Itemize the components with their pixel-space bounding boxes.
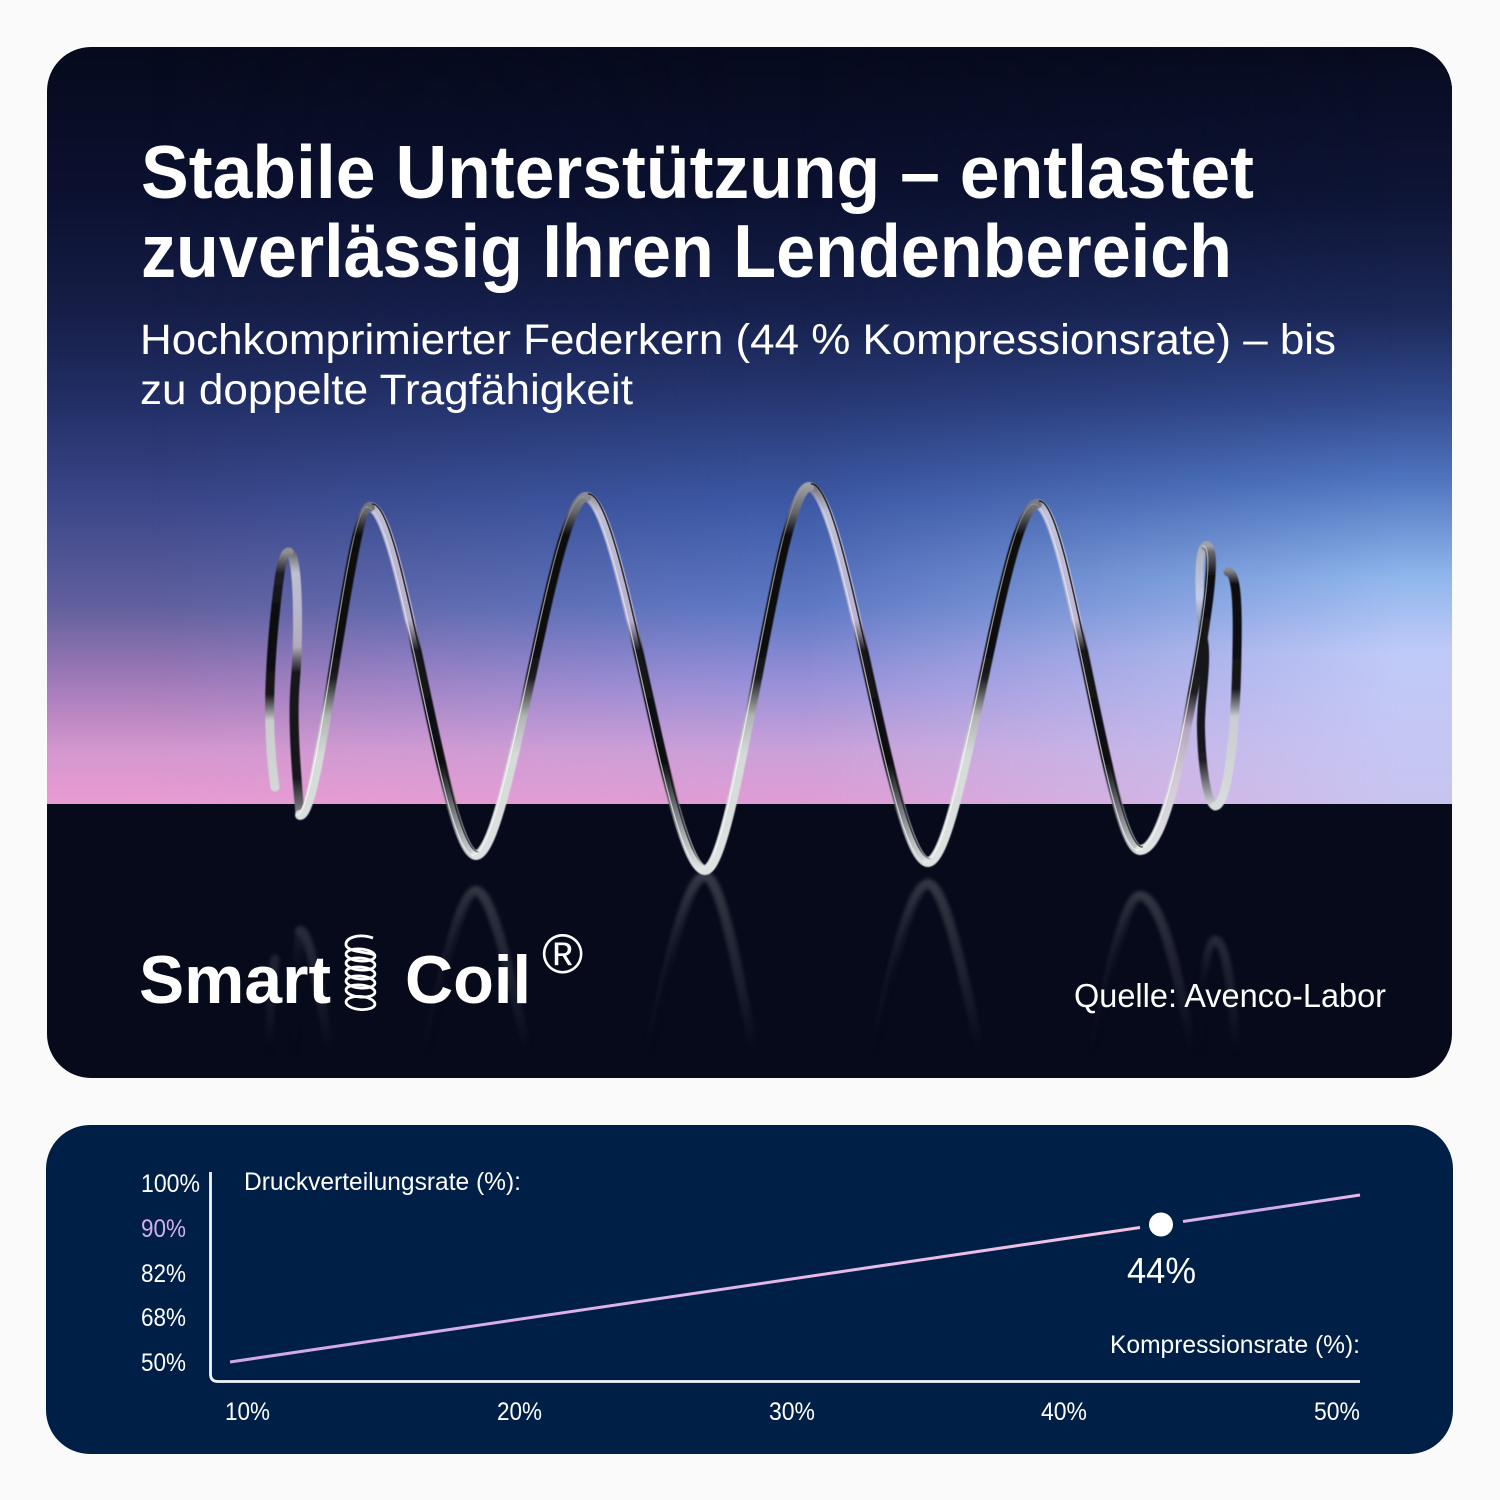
logo: Smart Coil: Smart — [139, 942, 331, 1018]
trend line — [230, 1195, 1360, 1362]
y-axis labels: 50% — [141, 1349, 186, 1377]
x-axis labels: 10% — [225, 1398, 270, 1426]
x-axis labels: 40% — [1041, 1398, 1087, 1426]
y-axis labels: 90% — [141, 1215, 186, 1243]
x-axis labels: 20% — [497, 1398, 542, 1426]
x-axis labels — [225, 1398, 1360, 1426]
source note: Quelle: Avenco-Labor — [1074, 977, 1386, 1014]
subtitle: zu doppelte Tragfähigkeit — [140, 366, 633, 414]
title — [141, 130, 1254, 293]
sky gradient background — [47, 47, 1452, 804]
logo: Smart Coil: Coil — [405, 942, 531, 1018]
x-axis labels: 50% — [1314, 1398, 1360, 1426]
logo: Smart Coil: ® — [542, 922, 583, 985]
x-axis title: Kompressionsrate (%): — [1110, 1331, 1360, 1359]
y-axis labels: 82% — [141, 1260, 186, 1288]
logo: Smart Coil — [139, 922, 583, 1018]
y-axis title: Druckverteilungsrate (%): — [244, 1168, 521, 1196]
illustration: metal coil spring — [270, 484, 1237, 870]
y-axis labels: 100% — [141, 1170, 200, 1198]
y-axis labels: 68% — [141, 1304, 186, 1332]
x-axis labels: 30% — [769, 1398, 815, 1426]
dark reflective floor — [47, 804, 1452, 1078]
y-axis labels — [141, 1170, 200, 1377]
marker dot — [1149, 1212, 1173, 1236]
subtitle: Hochkomprimierter Federkern (44 % Kompressionsrate) – bis — [140, 316, 1336, 364]
title: zuverlässig Ihren Lendenbereich — [141, 209, 1232, 293]
title: Stabile Unterstützung – entlastet — [141, 130, 1254, 214]
panel: hero with spring — [47, 47, 1452, 1078]
subtitle — [140, 316, 1336, 414]
panel: compression chart — [46, 1125, 1453, 1454]
marker value: 44% — [1127, 1250, 1196, 1291]
spring reflection — [266, 873, 1236, 1025]
icon: small spring — [345, 936, 376, 1011]
chart axes — [210, 1172, 1360, 1382]
